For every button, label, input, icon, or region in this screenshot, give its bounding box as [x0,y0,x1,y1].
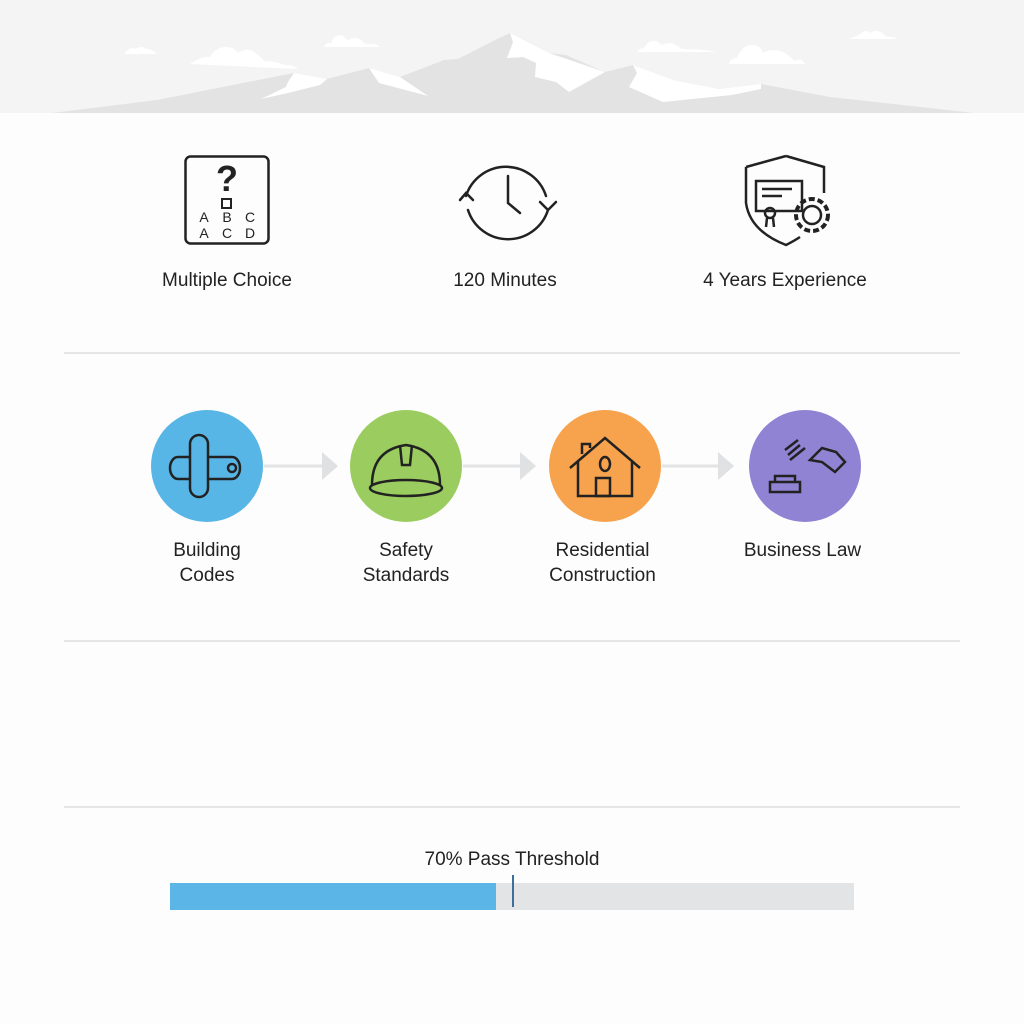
icon: multiple choice: A [199,225,209,241]
icon: multiple choice: C [245,209,255,225]
icon: multiple choice: B [222,209,232,225]
label: experience: 4 Years Experience [703,270,867,291]
icon: multiple choice: A [199,209,209,225]
label: safety standards [363,540,449,586]
label: building codes: Codes [180,565,234,586]
icon: multiple choice: ? [216,158,238,199]
label: residential construction: Construction [549,565,656,586]
label: safety standards: Standards [363,565,449,586]
icon: multiple choice: D [245,225,255,241]
icon: multiple choice [184,155,270,245]
label: 120 minutes: 120 Minutes [453,270,557,291]
label: building codes: Building [173,540,241,561]
progress bar [170,883,854,910]
icon: shield certificate gear [744,154,830,246]
label: building codes [173,540,241,586]
icon: multiple choice: C [222,225,232,241]
label: residential construction [549,540,656,586]
icon: clock [458,166,558,240]
label: business law: Business Law [744,540,861,561]
label: multiple choice: Multiple Choice [162,270,292,291]
flow: topic steps [151,410,862,586]
banner: mountains [0,0,1024,113]
label: pass threshold: 70% Pass Threshold [424,849,599,870]
label: safety standards: Safety [379,540,433,561]
label: residential construction: Residential [556,540,650,561]
